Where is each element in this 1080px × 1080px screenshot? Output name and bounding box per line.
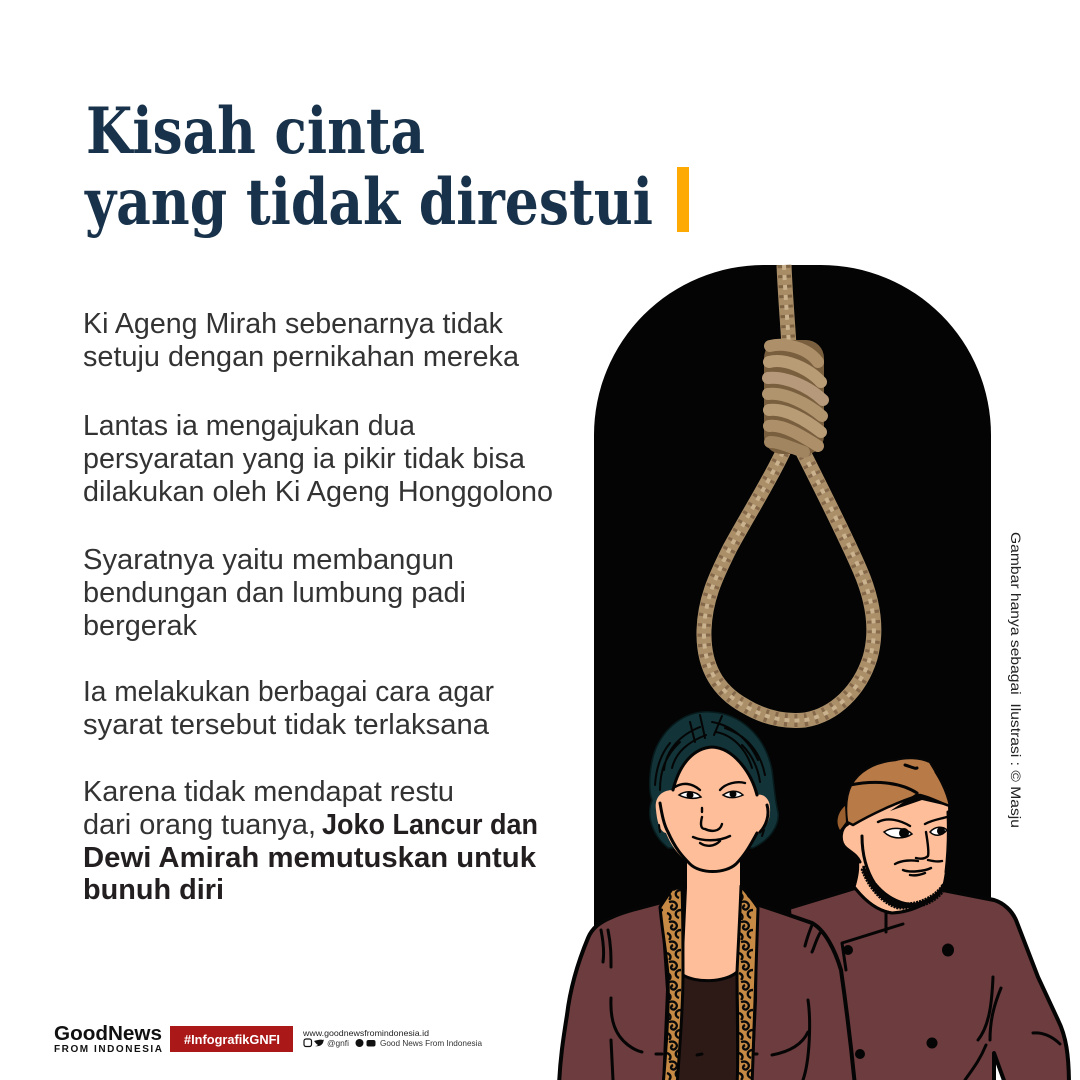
icon: facebook [356,1039,364,1047]
woman: hair [650,712,778,848]
man: blangkon headdress [838,758,950,830]
man: beard [862,866,944,908]
text block: paragraph 5 with bold conclusion: Dewi Amirah memutuskan untuk [83,842,537,874]
illustration: woman in kebaya [559,712,855,1080]
man: neck and face [842,790,948,913]
icon: twitter [314,1040,324,1046]
woman: jacket folds [601,925,820,1080]
title accent bar [677,167,689,232]
man: sleeve folds [965,977,1060,1080]
icon: hanging rope noose [704,265,874,720]
hashtag badge [170,1026,293,1052]
hashtag badge: #InfografikGNFI [184,1032,280,1047]
caption: rotated image credit: Gambar hanya sebagai Ilustrasi : © Masju [1008,532,1024,828]
text block: paragraph 1: setuju dengan pernikahan mereka [83,341,520,373]
man: buttons [843,944,954,1059]
text block: paragraph 3: Syaratnya yaitu membangun [83,544,454,576]
text block: paragraph 5 with bold conclusion: Karena tidak mendapat restu [83,776,454,808]
woman: dark inner blouse [676,972,738,1080]
logo: GoodNews From Indonesia: FROM INDONESIA [54,1044,162,1055]
woman: face [656,747,770,980]
man: ear and jaw outline [841,812,948,913]
man: jacket [789,888,1069,1080]
text block: paragraph 4 [83,676,494,741]
woman: facial features [659,782,764,846]
text block: paragraph 3: bendungan dan lumbung padi [83,577,466,609]
man: facial features [878,817,947,875]
footer website and social handles: Good News From Indonesia [380,1038,482,1048]
rope: coiled knot [764,340,824,454]
text block: paragraph 5 with bold conclusion: bunuh diri [83,874,224,906]
icon: instagram [304,1039,312,1046]
woman: left batik lapel [660,887,683,1080]
woman: face outline [660,747,768,872]
text block: paragraph 5 with bold conclusion [83,776,538,906]
woman: right batik lapel [737,886,758,1080]
man: collar and closure [842,888,942,970]
text block: paragraph 5 with bold conclusion: dari orang tuanya, [83,809,316,841]
icon: youtube [366,1040,376,1046]
panel: black arch background [594,265,991,1000]
woman: jacket right panel [751,904,855,1080]
text block: paragraph 4: Ia melakukan berbagai cara agar [83,676,494,708]
text block: paragraph 2 [83,410,553,508]
text block: paragraph 2: persyaratan yang ia pikir tidak bisa [83,443,526,475]
text block: paragraph 3 [83,544,466,642]
text block: paragraph 5 with bold conclusion: Joko Lancur dan [322,809,538,841]
text block: paragraph 1 [83,308,520,373]
woman: jacket left panel [559,902,668,1080]
title [84,94,653,240]
rope: upper strand [784,265,789,345]
footer website and social handles [302,1028,482,1048]
illustration: man in surjan and blangkon [789,758,1069,1080]
text block: paragraph 1: Ki Ageng Mirah sebenarnya tidak [83,308,503,340]
title: yang tidak direstui [84,165,653,240]
footer website and social handles: @gnfi [327,1038,349,1048]
text block: paragraph 3: bergerak [83,610,197,642]
text block: paragraph 4: syarat tersebut tidak terlaksana [83,709,490,741]
logo: GoodNews From Indonesia [54,1023,162,1055]
text block: paragraph 2: Lantas ia mengajukan dua [83,410,416,442]
footer website and social handles: www.goodnewsfromindonesia.id [302,1028,429,1038]
title: Kisah cinta [86,94,425,169]
woman: hair strands [655,715,765,790]
text block: paragraph 2: dilakukan oleh Ki Ageng Honggolono [83,476,553,508]
rope: loop [704,450,874,720]
logo: GoodNews From Indonesia: GoodNews [54,1023,162,1045]
